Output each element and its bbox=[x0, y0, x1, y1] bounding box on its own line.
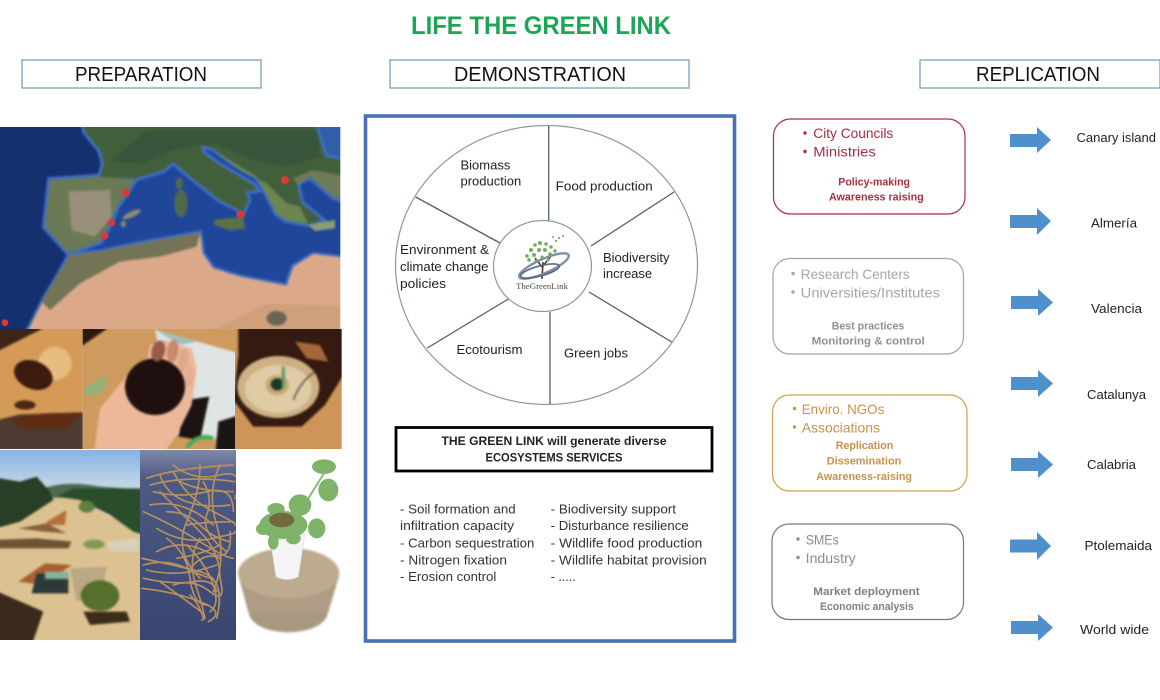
heading: replication: REPLICATION bbox=[976, 64, 1100, 86]
arrow: Calabria bbox=[1011, 451, 1053, 478]
panel: policy stakeholders: City Councils bbox=[813, 125, 893, 141]
wheel diagram bbox=[396, 126, 698, 404]
ecosystem services callout: ECOSYSTEMS SERVICES bbox=[486, 450, 622, 464]
wheel label: environment and climate change policies: climate change bbox=[400, 259, 488, 274]
panel: industry stakeholders bbox=[772, 524, 964, 620]
arrow: Almería bbox=[1010, 208, 1051, 235]
panel: NGO stakeholders: Replication bbox=[836, 440, 894, 452]
panel: industry stakeholders: Economic analysis bbox=[820, 601, 914, 613]
photo: hand with soil bbox=[82, 329, 235, 449]
label: World wide: World wide bbox=[1080, 622, 1149, 637]
heading: demonstration bbox=[390, 60, 689, 88]
services list: left column bbox=[400, 502, 534, 584]
label: Catalunya: Catalunya bbox=[1087, 387, 1147, 402]
panel: research stakeholders: Best practices bbox=[832, 320, 904, 332]
services list: right column: - Biodiversity support bbox=[551, 502, 677, 516]
panel: industry stakeholders: SMEs bbox=[806, 531, 839, 547]
panel: demonstration bbox=[366, 116, 734, 641]
ecosystem services callout: THE GREEN LINK will generate diverse bbox=[442, 434, 667, 448]
wheel label: food production: Food production bbox=[556, 178, 653, 194]
arrow: Valencia bbox=[1011, 289, 1053, 316]
label: Valencia: Valencia bbox=[1091, 301, 1143, 316]
wheel label: biomass production: production bbox=[460, 174, 521, 188]
wheel label: ecotourism: Ecotourism bbox=[456, 342, 522, 357]
photo: water-saving ring in soil bbox=[235, 329, 342, 449]
heading: replication bbox=[920, 60, 1160, 88]
services list: left column: - Nitrogen fixation bbox=[400, 554, 507, 568]
arrow: Catalunya bbox=[1011, 370, 1053, 397]
services list: right column: - Wildlife habitat provision bbox=[551, 554, 707, 568]
panel: industry stakeholders: Market deployment bbox=[813, 586, 920, 598]
wheel label: environment and climate change policies: policies bbox=[400, 276, 447, 291]
panel: NGO stakeholders bbox=[772, 395, 967, 491]
label: Calabria: Calabria bbox=[1087, 457, 1137, 472]
arrow: Ptolemaida bbox=[1010, 532, 1051, 560]
photo: roots bbox=[140, 450, 239, 640]
panel: research stakeholders: Monitoring & control bbox=[812, 336, 925, 348]
wheel label: green jobs: Green jobs bbox=[564, 346, 629, 360]
panel: NGO stakeholders: Awareness-raising bbox=[816, 471, 912, 483]
services list: left column: infiltration capacity bbox=[400, 519, 515, 533]
panel: policy stakeholders bbox=[774, 119, 965, 214]
wheel label: environment and climate change policies: Environment & bbox=[400, 242, 489, 257]
photo: field with trees bbox=[0, 450, 140, 640]
panel: policy stakeholders: Awareness raising bbox=[829, 192, 924, 204]
panel: policy stakeholders: Ministries bbox=[813, 144, 876, 160]
wheel label: biodiversity increase: Biodiversity bbox=[603, 250, 670, 265]
heading: preparation: PREPARATION bbox=[75, 64, 207, 86]
heading: preparation bbox=[22, 60, 261, 88]
label: Ptolemaida: Ptolemaida bbox=[1084, 538, 1153, 553]
panel: industry stakeholders: Industry bbox=[806, 550, 856, 566]
services list: left column: - Erosion control bbox=[400, 570, 496, 584]
arrow: Canary island bbox=[1010, 127, 1051, 153]
panel: research stakeholders: Universities/Institutes bbox=[801, 284, 940, 300]
services list: right column: - ..... bbox=[551, 570, 576, 584]
label: Canary island: Canary island bbox=[1076, 130, 1156, 145]
ecosystem services callout bbox=[396, 428, 712, 471]
panel: research stakeholders bbox=[773, 258, 964, 354]
map markers bbox=[2, 176, 289, 326]
photo: planting hole bbox=[0, 329, 83, 449]
panel: research stakeholders: Research Centers bbox=[801, 266, 910, 282]
wheel label: biomass production: Biomass bbox=[460, 158, 511, 172]
photo: plant in biodegradable ring bbox=[236, 450, 342, 640]
services list: right column: - Disturbance resilience bbox=[551, 519, 689, 533]
heading: demonstration: DEMONSTRATION bbox=[454, 64, 626, 86]
label: Almería: Almería bbox=[1091, 216, 1138, 230]
services list: right column: - Wildlife food production bbox=[551, 536, 702, 550]
wheel label: biodiversity increase: increase bbox=[603, 266, 652, 281]
panel: NGO stakeholders: Associations bbox=[802, 420, 880, 436]
icon: tree logo: TheGreenLink bbox=[516, 281, 569, 291]
panel: policy stakeholders: Policy-making bbox=[838, 177, 910, 189]
arrow: World wide bbox=[1011, 614, 1053, 641]
services list: right column bbox=[551, 502, 707, 584]
panel: NGO stakeholders: Dissemination bbox=[827, 456, 902, 468]
panel: preparation photos bbox=[0, 113, 353, 650]
satellite map of the Mediterranean bbox=[0, 127, 340, 329]
services list: left column: - Soil formation and bbox=[400, 502, 516, 516]
title: LIFE THE GREEN LINK bbox=[411, 12, 671, 40]
hub with The Green Link logo bbox=[494, 220, 592, 312]
services list: left column: - Carbon sequestration bbox=[400, 536, 534, 550]
panel: NGO stakeholders: Enviro. NGOs bbox=[802, 401, 884, 417]
